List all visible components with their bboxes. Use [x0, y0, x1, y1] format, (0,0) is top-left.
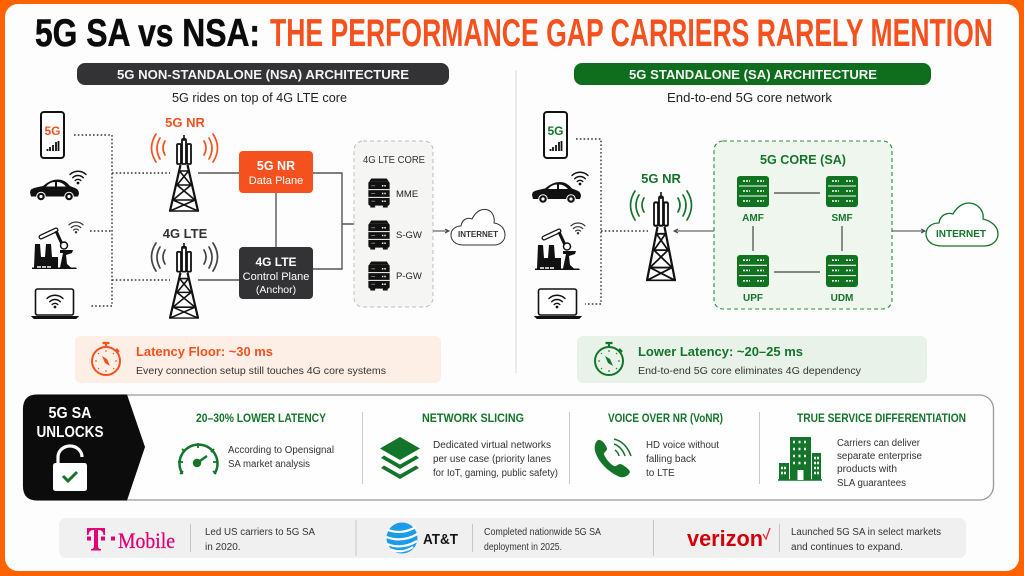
4G LTE tower: 4G LTE [163, 226, 208, 241]
icon: phone [544, 112, 567, 158]
panel divider [515, 70, 517, 373]
NSA heading pill [77, 63, 449, 85]
SA heading pill [574, 63, 931, 85]
device connections [74, 135, 170, 306]
panel: NSA architecture [30, 63, 505, 383]
benefit: lower latency: According to Opensignal [228, 445, 334, 456]
arrow: core to tower [674, 229, 714, 233]
5G NR tower [630, 171, 692, 280]
server: MME [368, 178, 418, 208]
device connections [576, 139, 648, 304]
benefit: lower latency: SA market analysis [228, 459, 310, 470]
AT&T [386, 522, 601, 554]
5G core box: 5G CORE (SA) [760, 152, 846, 167]
icon: office buildings [778, 437, 822, 480]
4G LTE core box [354, 141, 433, 307]
benefit: network slicing: for IoT, gaming, public safety) [433, 468, 558, 479]
NSA latency callout: Every connection setup still touches 4G core systems [136, 366, 386, 377]
T-Mobile: in 2020. [205, 542, 241, 553]
SA latency callout: End-to-end 5G core eliminates 4G dependency [638, 366, 861, 377]
benefit: service differentiation: products with [837, 464, 897, 475]
panel: 5G SA unlocks [23, 394, 994, 500]
unlocks badge: 5G SA [48, 405, 92, 422]
arrow to internet [433, 229, 449, 233]
AT&T: Completed nationwide 5G SA [484, 527, 601, 538]
benefit: voice over NR: to LTE [646, 468, 675, 479]
icon: laptop [32, 289, 78, 318]
node: UPF: UPF [743, 293, 763, 304]
icon: open lock [53, 446, 87, 491]
server: MME: MME [396, 189, 418, 200]
node: UPF [737, 255, 769, 304]
internet cloud: INTERNET [936, 229, 986, 240]
icon: laptop [535, 289, 581, 318]
benefit: lower latency [178, 411, 334, 474]
benefit: voice over NR [595, 411, 723, 479]
benefit: network slicing [380, 411, 558, 479]
4G LTE tower [152, 226, 218, 318]
SA heading pill: 5G STANDALONE (SA) ARCHITECTURE [629, 67, 877, 82]
NSA subtitle: 5G rides on top of 4G LTE core [172, 91, 347, 105]
5G core box [714, 141, 892, 309]
SA subtitle: End-to-end 5G core network [667, 91, 833, 105]
5G NR tower: 5G NR [641, 171, 681, 186]
internet cloud [451, 209, 505, 245]
benefit: voice over NR: falling back [646, 454, 697, 465]
4G LTE control plane box: 4G LTE [255, 255, 297, 269]
icon: factory [32, 222, 83, 269]
unlocks badge: UNLOCKS [36, 424, 104, 441]
unlocks badge [23, 394, 145, 500]
Verizon: Launched 5G SA in select markets [791, 527, 941, 538]
icon: phone handset [595, 439, 631, 477]
AT&T: AT&T [423, 531, 458, 548]
NSA heading pill: 5G NON-STANDALONE (NSA) ARCHITECTURE [117, 67, 409, 82]
server: S-GW [368, 220, 422, 250]
icon: car [532, 172, 588, 203]
5G NR tower: 5G NR [165, 115, 205, 130]
icon: phone [41, 112, 64, 158]
benefit: network slicing: Dedicated virtual networks [433, 440, 551, 451]
server: P-GW: P-GW [396, 271, 422, 282]
internet cloud: INTERNET [458, 230, 498, 239]
panel: carriers [59, 518, 966, 558]
title: 5G SA vs NSA: [35, 12, 260, 55]
benefit: service differentiation [778, 411, 966, 489]
T-Mobile: Led US carriers to 5G SA [205, 527, 315, 538]
Verizon: and continues to expand. [791, 542, 903, 553]
connectors [198, 173, 354, 280]
node: AMF [737, 176, 769, 224]
T-Mobile [87, 527, 315, 553]
5G NR data plane box: Data Plane [249, 175, 303, 187]
icon: phone: 5G [44, 124, 61, 138]
benefit: lower latency: 20–30% LOWER LATENCY [196, 411, 326, 425]
icon: AT&T globe [386, 522, 418, 554]
benefit: service differentiation: separate enterprise [837, 451, 922, 462]
5G NR data plane box [239, 151, 313, 193]
benefit: voice over NR: HD voice without [646, 440, 719, 451]
internet cloud [926, 203, 998, 246]
icon: factory [535, 223, 585, 270]
arrow to internet [892, 229, 925, 233]
benefit: service differentiation: SLA guarantees [837, 478, 906, 489]
NSA latency callout: Latency Floor: ~30 ms [136, 345, 273, 359]
icon: gauge [178, 443, 218, 474]
benefit: service differentiation: Carriers can deliver [837, 438, 921, 449]
server: S-GW: S-GW [396, 230, 422, 241]
node: UDM: UDM [831, 293, 853, 304]
5G NR tower [152, 115, 218, 211]
SA latency callout: Lower Latency: ~20–25 ms [638, 345, 803, 359]
icon: phone: 5G [547, 124, 564, 138]
benefit: voice over NR: VOICE OVER NR (VoNR) [608, 411, 723, 425]
benefit: service differentiation: TRUE SERVICE DIFFERENTIATION [797, 411, 966, 425]
4G LTE control plane box [239, 247, 313, 299]
5G NR data plane box: 5G NR [257, 159, 295, 173]
4G LTE control plane box: Control Plane [243, 271, 309, 283]
node: UDM [826, 255, 858, 304]
icon: layers [380, 437, 420, 479]
4G LTE control plane box: (Anchor) [256, 284, 296, 296]
icon: car [30, 171, 86, 201]
benefit: network slicing: NETWORK SLICING [422, 411, 524, 425]
Verizon: verizon [687, 526, 763, 551]
AT&T: deployment in 2025. [484, 542, 562, 553]
Verizon [687, 526, 941, 553]
server: P-GW [368, 261, 422, 291]
NSA latency callout [75, 336, 441, 383]
node: AMF: AMF [742, 213, 764, 224]
node: SMF [826, 176, 858, 224]
panel: SA architecture [532, 63, 998, 383]
4G LTE core box: 4G LTE CORE [363, 155, 425, 166]
SA latency callout [577, 336, 927, 383]
node: SMF: SMF [831, 213, 853, 224]
benefit: network slicing: per use case (priority lanes [433, 454, 551, 465]
T-Mobile: Mobile [118, 528, 175, 553]
